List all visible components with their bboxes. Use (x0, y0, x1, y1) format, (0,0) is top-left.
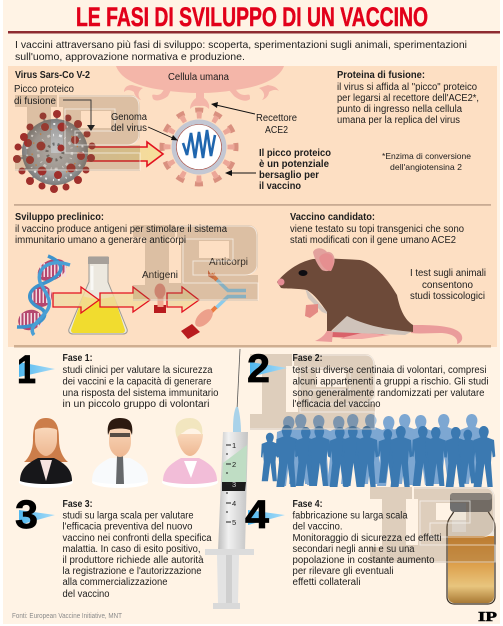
badge: phase 2: 2 (247, 347, 270, 391)
text: phase 4: Monitoraggio di sicurezza ed effetti (292, 533, 442, 544)
text: phase 3: l'efficacia preventiva del nuovo (62, 522, 193, 532)
callout: spike target: il vaccino (259, 181, 301, 192)
text: vaccine candidate: viene testato su topi transgenici che sono (290, 224, 464, 235)
text: phase 4: del vaccino. (292, 522, 342, 532)
text: phase 1: studi clinici per valutare la sicurezza (62, 365, 213, 376)
badge: phase 2 (247, 347, 287, 391)
callout: spike target: è un potenziale (259, 159, 329, 170)
syringe scale: 4 (232, 499, 236, 508)
text: phase 3: Fase 3: (62, 499, 92, 510)
syringe scale: 5 (232, 518, 236, 527)
footnote: ACE2: *Enzima di conversione (382, 151, 471, 161)
text: phase 3 (62, 499, 212, 600)
text: phase 1: in un piccolo gruppo di volontari (62, 399, 210, 410)
footnote: ACE2 (382, 151, 471, 172)
text: phase 3: alla commercializzazione (62, 577, 168, 588)
text: fusion protein: il virus si affida al "picco" proteico (337, 82, 477, 93)
callout: spike target: bersaglio per (259, 170, 319, 181)
text: animal tests: studi tossicologici (410, 291, 485, 302)
text: phase 3: la registrazione e l'autorizzazione (62, 566, 202, 577)
icon: antigen (142, 270, 178, 313)
text: preclinical: il vaccino produce antigeni per stimolare il sistema (15, 224, 227, 235)
text: phase 4: popolazione in costante aumento (292, 555, 435, 566)
icon: virus cross-section (158, 106, 240, 188)
text: animal tests: I test sugli animali (410, 268, 486, 279)
icon: volunteer woman (19, 418, 73, 488)
icons: crowd of volunteers (261, 414, 495, 487)
syringe scale: 3 (232, 480, 236, 489)
text: phase 2: sono generalmente randomizzati per valutare (292, 388, 485, 399)
text: vaccine candidate: Vaccino candidato: (290, 212, 375, 223)
callout: spike target: Il picco proteico (259, 148, 331, 159)
text: fusion protein: per legarsi al recettore dell'ACE2*, (337, 93, 479, 104)
text: phase 1: dei vaccini e la capacità di generare (62, 376, 212, 388)
text: phase 4: fabbricazione su larga scala (292, 510, 408, 522)
watermark middle (133, 225, 258, 301)
text: phase 3: il produttore richiede alle autorità (62, 555, 204, 566)
label: spike with arrow (14, 84, 95, 131)
icon: antibodies (181, 257, 248, 339)
text: phase 4 (292, 499, 442, 588)
text: fusion protein: punto di ingresso nella cellula (337, 104, 462, 115)
badge: phase 1: 1 (17, 348, 36, 392)
badge: phase 4 (245, 493, 285, 537)
label: ACE2 receptor: ACE2 (265, 125, 288, 136)
syringe scale: 1 (232, 441, 236, 450)
label: virus genome: Genoma (111, 112, 147, 123)
icon: mouse (277, 248, 462, 344)
icon: volunteer man (92, 418, 148, 488)
intro text: sull'uomo, approvazione normativa e produzione. (15, 51, 245, 63)
badge: phase 1 (17, 348, 55, 392)
heading: virus: Virus Sars-Co V-2 (15, 70, 90, 81)
text: phase 4: effetti collaterali (292, 577, 360, 588)
text: phase 2 (292, 353, 488, 410)
label: human cell: Cellula umana (168, 72, 229, 83)
intro text: I vaccini attraversano più fasi di sviluppo: scoperta, sperimentazioni sugli animali, sperimentazioni (15, 39, 467, 51)
watermark behind phase 4 (370, 487, 495, 563)
syringe scale (226, 441, 236, 527)
dividers (14, 204, 491, 348)
text: phase 1 (62, 353, 219, 410)
icon: vaccine vial (447, 493, 495, 604)
footnote: ACE2: dell'angiotensina 2 (390, 162, 462, 172)
icon: syringe (205, 349, 254, 609)
icon: flask (69, 257, 127, 334)
label: ACE2 receptor: Recettore (256, 113, 297, 124)
title rule (8, 31, 500, 34)
arrows: preclinical chain (53, 287, 199, 313)
label: spike with arrow: di fusione (14, 96, 56, 107)
text: preclinical: immunitario umano a generare anticorpi (15, 235, 186, 246)
text: fusion protein (337, 70, 479, 126)
badge: phase 3: 3 (15, 493, 38, 537)
logo: IP (478, 610, 498, 625)
text: phase 2: alcuni appartenenti a gruppi a rischio. Gli studi (292, 376, 488, 388)
source: Fonti: European Vaccine Initiative, MNT (12, 613, 123, 620)
syringe scale: 2 (232, 460, 236, 469)
text: fusion protein: Proteina di fusione: (337, 70, 425, 81)
icon: DNA helix (15, 255, 70, 335)
label: virus genome (111, 112, 178, 140)
intro text (15, 39, 467, 63)
text: animal tests: consentono (422, 280, 473, 291)
badge: phase 4: 4 (245, 493, 270, 537)
label: spike with arrow: Picco proteico (14, 84, 74, 95)
text: phase 3: vaccino nei confronti della specifica (62, 533, 212, 544)
text: phase 3: del vaccino (62, 589, 110, 600)
text: preclinical: Sviluppo preclinico: (15, 212, 104, 223)
text: phase 3: studi su larga scala per valutare (62, 510, 194, 522)
label: antibodies: Anticorpi (209, 257, 248, 268)
watermark top left (15, 95, 140, 171)
badge: phase 3 (15, 493, 55, 537)
text: phase 4: per rilevare gli eventuali (292, 566, 394, 577)
text: phase 3: malattia. In caso di esito positivo, (62, 544, 200, 555)
text: vaccine candidate: stati modificati con il gene umano ACE2 (290, 235, 456, 246)
text: phase 2: l'efficacia del vaccino (292, 399, 381, 410)
icon: volunteer woman blonde (162, 418, 218, 488)
label: ACE2 receptor (211, 102, 297, 136)
label: virus genome: del virus (111, 123, 147, 134)
text: preclinical (15, 212, 227, 246)
text: phase 4: Fase 4: (292, 499, 322, 510)
text: phase 2: test su diverse centinaia di volontari, compresi (292, 365, 486, 376)
text: phase 1: una risposta del sistema immunitario (62, 388, 219, 399)
text: phase 4: secondari negli anni e su una (292, 544, 415, 555)
text: phase 2: Fase 2: (292, 353, 322, 364)
icon: coronavirus (13, 110, 96, 193)
watermark behind phase 2 (250, 354, 375, 430)
label: antigens: Antigeni (142, 270, 178, 281)
icon: human cell (116, 66, 284, 109)
callout: spike target (225, 148, 331, 192)
text: fusion protein: umana per la replica del virus (337, 115, 460, 126)
panel: peach research background (8, 66, 497, 347)
text: phase 1: Fase 1: (62, 353, 92, 364)
arrow: coronavirus to cross-section (84, 142, 163, 166)
text: animal tests (410, 268, 486, 302)
text: vaccine candidate (290, 212, 464, 246)
